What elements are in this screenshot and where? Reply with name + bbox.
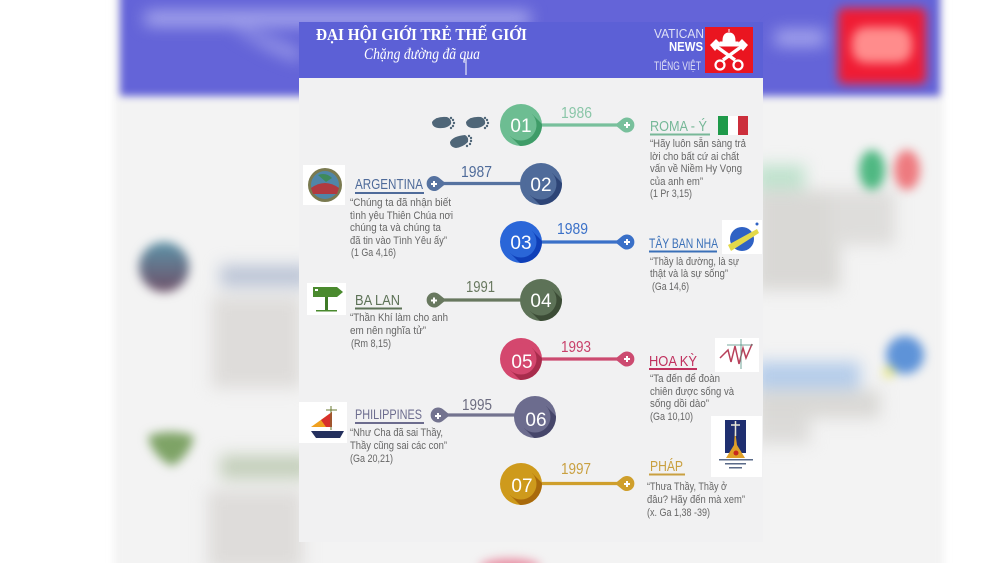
icon: footprints xyxy=(432,117,489,148)
quote: “Thưa Thầy, Thầy ở xyxy=(647,481,727,493)
quote xyxy=(650,256,739,293)
icon: WYD 1989 logo xyxy=(722,220,762,254)
quote: “Chúng ta đã nhận biết xyxy=(350,197,451,209)
quote: chúng ta và chúng ta xyxy=(350,222,441,234)
quote: (x. Ga 1,38 -39) xyxy=(647,507,710,519)
quote: (Ga 20,21) xyxy=(350,453,393,465)
heading: Tây Ban Nha: TÂY BAN NHA xyxy=(649,236,718,251)
quote: Thầy cũng sai các con” xyxy=(350,440,447,452)
quote: (1 Pr 3,15) xyxy=(650,188,692,200)
quote: tình yêu Thiên Chúa nơi xyxy=(350,210,453,222)
quote: của anh em” xyxy=(650,176,703,188)
icon: WYD 1995 logo xyxy=(299,402,347,443)
quote: vấn về Niềm Hy Vọng xyxy=(650,163,742,175)
quote xyxy=(350,312,448,350)
timeline item 02: Argentina: 02 xyxy=(530,175,552,196)
icon: Italian flag xyxy=(718,116,748,135)
heading: Philippines: PHILIPPINES xyxy=(355,407,422,422)
quote: đã tin vào Tình Yêu ấy” xyxy=(350,235,447,247)
quote: sống dồi dào” xyxy=(650,398,709,410)
timeline item 05: Hoa Kỳ: 05 xyxy=(511,352,533,373)
quote: “Thần Khí làm cho anh xyxy=(350,312,448,324)
timeline item 01: Roma: 01 xyxy=(510,116,532,137)
heading: Roma: ROMA - Ý xyxy=(650,118,707,135)
Vatican News wordmark xyxy=(654,26,704,73)
timeline item 02: Argentina: 1987 xyxy=(461,164,492,181)
quote: “Ta đến để đoàn xyxy=(650,373,720,385)
icon: WYD 1997 logo xyxy=(711,416,762,477)
Vatican News wordmark: TIẾNG VIỆT xyxy=(654,58,701,73)
timeline item 01: Roma xyxy=(500,104,748,200)
quote xyxy=(650,373,734,423)
heading: Hoa Kỳ: HOA KỲ xyxy=(649,353,697,370)
Vatican News wordmark: NEWS xyxy=(669,39,703,54)
timeline item 04: Ba Lan xyxy=(307,279,580,350)
quote: “Hãy luôn sẵn sàng trả xyxy=(650,137,746,150)
quote: em nên nghĩa tử” xyxy=(350,325,426,337)
header banner xyxy=(299,22,763,78)
quote xyxy=(647,481,745,519)
quote: “Thầy là đường, là sự xyxy=(650,256,739,268)
quote xyxy=(350,427,447,465)
handwritten subtitle xyxy=(364,46,480,75)
heading: Ba Lan: BA LAN xyxy=(355,293,400,309)
icon: WYD 1993 logo xyxy=(715,338,759,372)
timeline item 02: Argentina xyxy=(303,163,580,259)
quote: lời cho bất cứ ai chất xyxy=(650,151,739,163)
heading: Argentina: ARGENTINA xyxy=(355,177,423,193)
quote: thật và là sự sống” xyxy=(650,268,728,280)
timeline item 04: Ba Lan: 1991 xyxy=(466,279,495,296)
title: ĐẠI HỘI GIỚI TRẺ THẾ GIỚI xyxy=(316,25,527,44)
quote xyxy=(650,137,746,200)
timeline item 04: Ba Lan: 04 xyxy=(530,291,552,312)
timeline item 07: Pháp xyxy=(500,416,762,523)
timeline item 03: Tây Ban Nha: 03 xyxy=(510,233,532,254)
timeline item 07: Pháp: 1997 xyxy=(561,461,591,478)
icon: WYD 1987 logo xyxy=(303,165,345,205)
timeline item 07: Pháp: 07 xyxy=(511,476,533,497)
handwritten subtitle: Chặng đường đã qua xyxy=(364,46,480,63)
timeline item 06: Philippines: 06 xyxy=(525,410,547,431)
timeline item 06: Philippines: 1995 xyxy=(462,397,492,414)
icon: Vatican emblem xyxy=(705,27,753,73)
timeline item 05: Hoa Kỳ xyxy=(500,338,759,423)
main infographic panel xyxy=(299,22,763,542)
quote: (Ga 14,6) xyxy=(652,281,689,293)
quote: (Ga 10,10) xyxy=(650,411,693,423)
timeline item 03: Tây Ban Nha xyxy=(500,220,762,293)
quote: đâu? Hãy đến mà xem” xyxy=(647,494,745,506)
Vatican News wordmark: VATICAN xyxy=(654,26,704,41)
quote: (Rm 8,15) xyxy=(351,338,391,350)
timeline item 01: Roma: 1986 xyxy=(561,105,592,122)
heading: Pháp: PHÁP xyxy=(650,458,683,475)
quote: (1 Ga 4,16) xyxy=(351,247,396,259)
timeline item 06: Philippines xyxy=(299,396,574,465)
quote: chiên được sống và xyxy=(650,386,734,398)
timeline item 05: Hoa Kỳ: 1993 xyxy=(561,339,591,356)
icon: signpost logo xyxy=(307,283,346,315)
timeline item 03: Tây Ban Nha: 1989 xyxy=(557,221,588,238)
quote xyxy=(350,197,453,259)
quote: “Như Cha đã sai Thầy, xyxy=(350,427,443,439)
